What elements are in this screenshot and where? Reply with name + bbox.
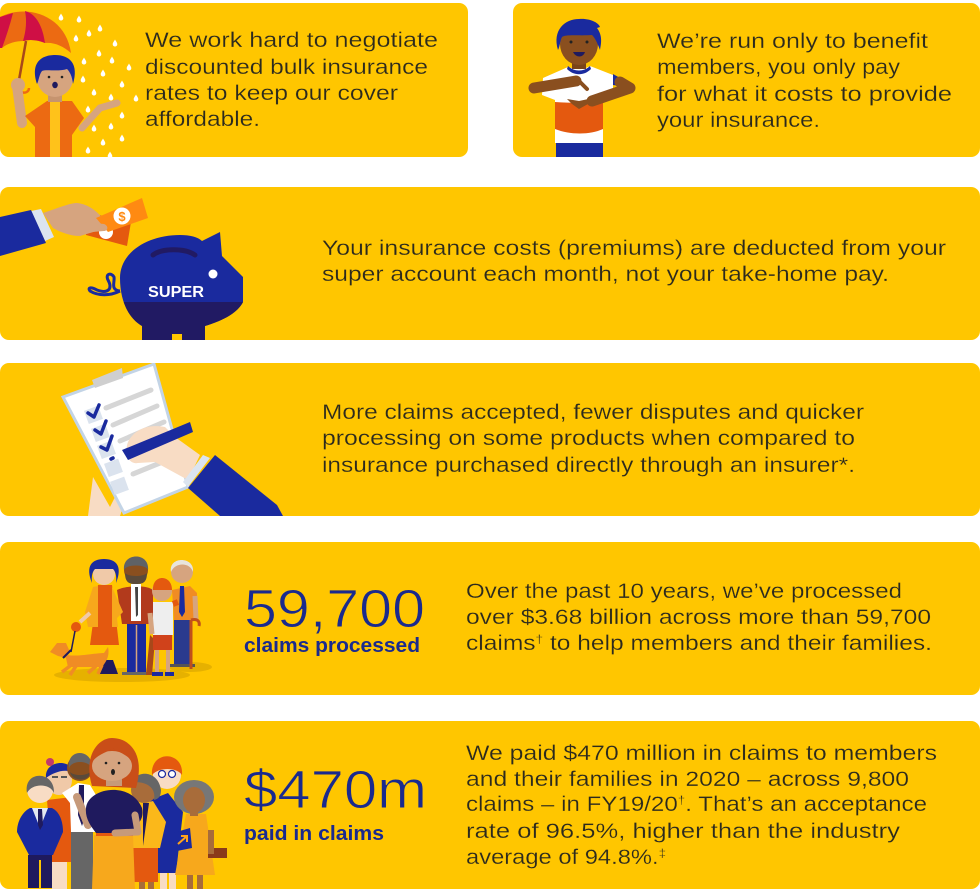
icon: hand putting money into piggy bank: $ [118, 209, 126, 224]
stat: $470m paid in claims: paid in claims [244, 823, 384, 845]
text: more claims accepted: processing on some products when compared to [322, 426, 855, 450]
man in white shirt [62, 753, 96, 889]
icon: person with umbrella in the rain [0, 11, 138, 158]
text: claims processed over 10 years: † [536, 632, 543, 646]
text: more claims accepted: insurance purchased directly through an insurer*. [322, 453, 855, 477]
text: claims processed over 10 years [466, 579, 932, 655]
text: discounted bulk rates: rates to keep our cover [145, 81, 398, 105]
stat: $470m paid in claims [244, 760, 427, 845]
panel: more claims accepted [0, 363, 980, 516]
stat: 59,700 claims processed: 59,700 [244, 579, 425, 639]
text: claims processed over 10 years: to help members and their families. [543, 631, 932, 655]
woman with red hair [150, 756, 183, 889]
panel: run only to benefit members [513, 3, 980, 157]
text: run only to benefit members [657, 29, 952, 132]
text: more claims accepted: More claims accepted, fewer disputes and quicker [322, 400, 864, 424]
panel: 59,700 claims processed [0, 542, 980, 695]
text: discounted bulk rates: affordable. [145, 107, 260, 131]
woman in navy top and yellow skirt [86, 738, 143, 889]
stat: 59,700 claims processed: claims processed [244, 635, 420, 657]
text: run only to benefit members: your insurance. [657, 108, 820, 132]
panel: premiums deducted from super [0, 187, 980, 340]
text: claims processed over 10 years: over $3.68 billion across more than 59,700 [466, 605, 931, 629]
icon: hand ticking a clipboard checklist [63, 364, 283, 516]
text: run only to benefit members: members, you only pay [657, 55, 900, 79]
woman with blue hair [46, 758, 73, 889]
text: claims paid in 2020: average of 94.8%. [466, 845, 641, 869]
text: claims paid in 2020: and their families in 2020 – across 9,800 [466, 767, 909, 791]
panel: $470m paid in claims [0, 721, 980, 889]
man in blue suit [17, 776, 63, 888]
stat: $470m paid in claims: $470m [244, 760, 427, 820]
text: claims paid in 2020: claims – in FY19/20 [466, 792, 655, 816]
text: claims processed over 10 years: Over the past 10 years, we’ve processed [466, 579, 902, 603]
text: premiums deducted from super: super account each month, not your take-home pay. [322, 262, 889, 286]
icon: crowd of diverse members [17, 738, 227, 889]
child [146, 578, 178, 675]
older man [169, 560, 199, 669]
icon: hand putting money into piggy bank [0, 198, 243, 340]
icon: man gesturing with hands [534, 19, 630, 157]
text: discounted bulk rates [145, 28, 438, 131]
icon: hand putting money into piggy bank: SUPER [148, 284, 204, 301]
text: claims paid in 2020: . That’s an acceptance [685, 792, 927, 816]
text: claims paid in 2020 [466, 741, 937, 869]
text: claims paid in 2020: rate of 96.5%, higher than the industry [466, 819, 900, 843]
panel: discounted bulk rates [0, 3, 468, 158]
icon: family group with dog [50, 556, 212, 682]
text: claims paid in 2020: ‡ [659, 846, 666, 860]
woman in orange dress with tablet [173, 780, 227, 889]
text: claims paid in 2020: We paid $470 million in claims to members [466, 741, 937, 765]
man with beard [117, 556, 153, 675]
text: run only to benefit members: for what it costs to provide [657, 82, 952, 106]
text: premiums deducted from super: Your insurance costs (premiums) are deducted from your [322, 236, 946, 260]
text: discounted bulk rates: We work hard to negotiate [145, 28, 438, 52]
woman in yellow cardigan [131, 774, 166, 889]
text: claims paid in 2020: † [678, 793, 685, 807]
text: discounted bulk rates: discounted bulk insurance [145, 55, 428, 79]
text: premiums deducted from super [322, 236, 946, 286]
text: claims processed over 10 years: claims [466, 631, 527, 655]
dog [50, 643, 109, 675]
woman [71, 559, 123, 674]
text: more claims accepted [322, 400, 864, 477]
text: run only to benefit members: We’re run only to benefit [657, 29, 928, 53]
